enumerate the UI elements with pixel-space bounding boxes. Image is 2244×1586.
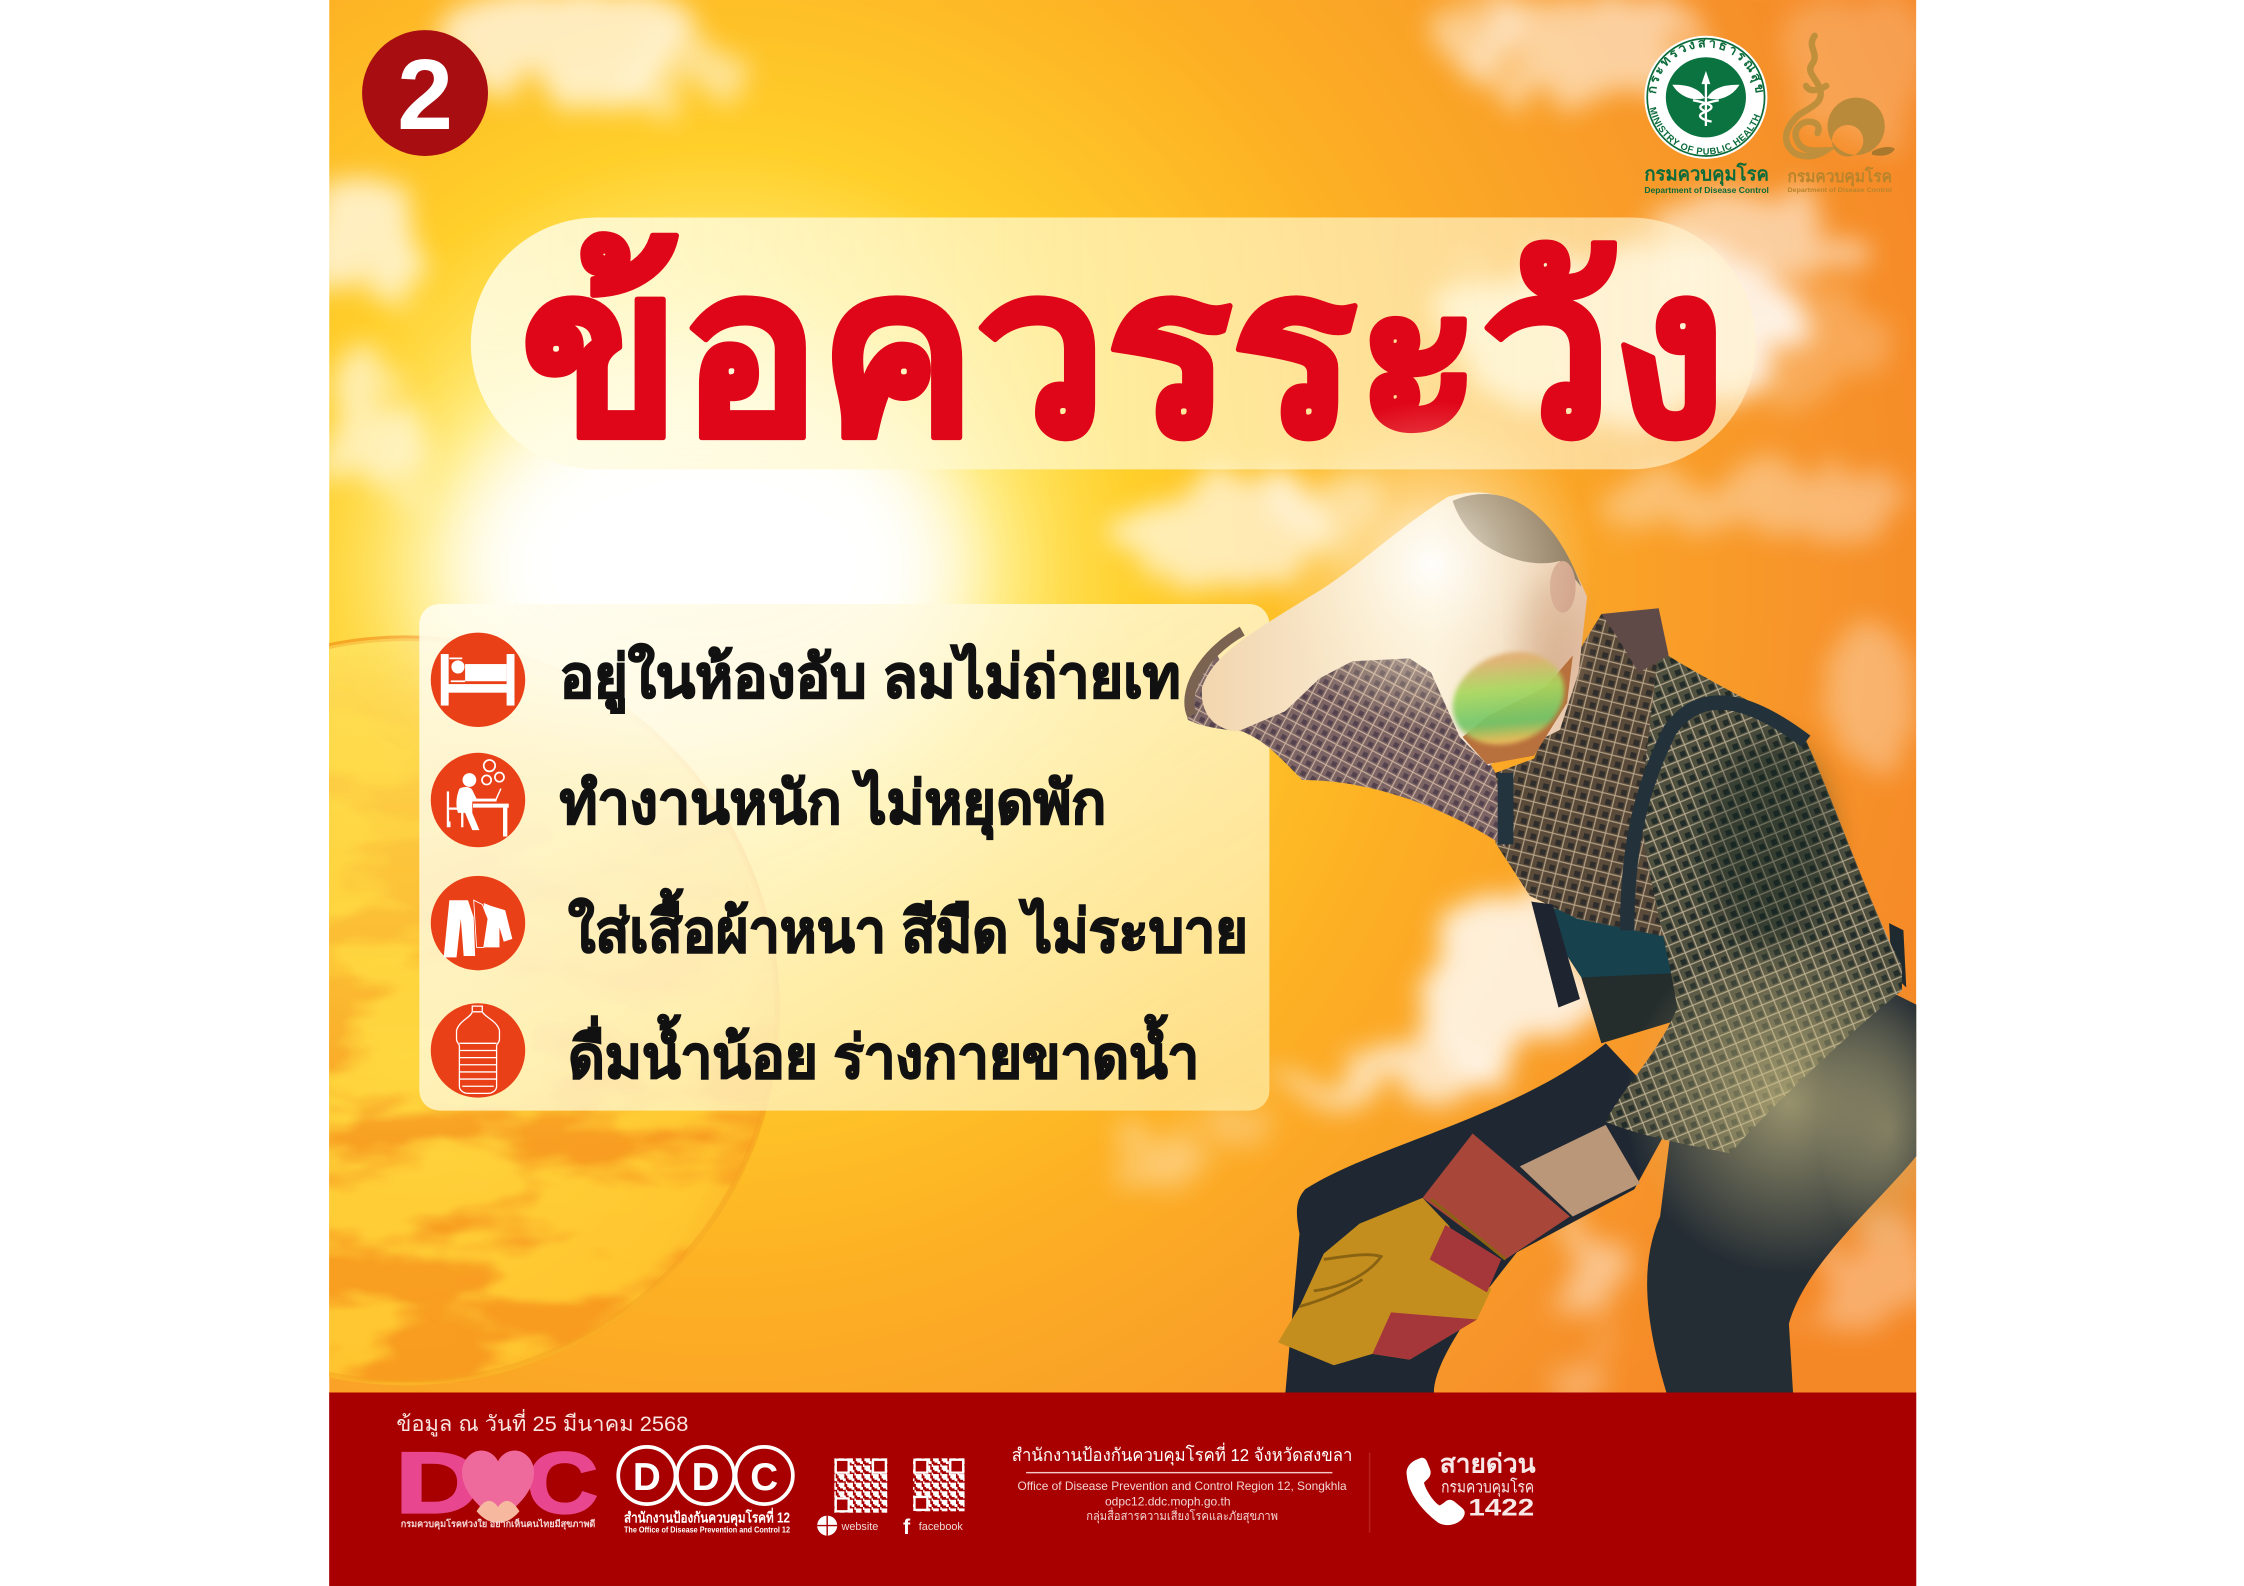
logo: ministry of public health bbox=[1644, 36, 1769, 195]
footer band bbox=[329, 1392, 1916, 1586]
logo: ministry of public health: Department of Disease Control bbox=[1644, 186, 1769, 195]
hotline: สายด่วน bbox=[1440, 1451, 1536, 1479]
logo: 60 years: Department of Disease Control bbox=[1787, 187, 1892, 194]
data date: ข้อมูล ณ วันที่ 25 มีนาคม 2568 bbox=[396, 1409, 688, 1437]
suspender straps bbox=[1627, 703, 1806, 930]
logo: white DDC: สำนักงานป้องกันควบคุมโรคที่ 12 bbox=[624, 1507, 790, 1527]
icon: worker at desk bbox=[431, 753, 525, 847]
logo: pink DDC: D bbox=[395, 1436, 481, 1532]
torso shirt bbox=[1496, 614, 1663, 936]
qr: facebook bbox=[903, 1458, 965, 1539]
left sleeve bbox=[1186, 647, 1506, 847]
logo: ministry of public health: MINISTRY OF PUBLIC HEALTH bbox=[1650, 107, 1760, 155]
illustration: worker bbox=[1186, 401, 1961, 1395]
icon: phone bbox=[1407, 1458, 1465, 1525]
risk text 2: ทำงานหนัก ไม่หยุดพัก bbox=[560, 769, 1106, 840]
title pill bbox=[471, 218, 1756, 469]
office info: odpc12.ddc.moph.go.th bbox=[1105, 1495, 1231, 1509]
panel: precautions bbox=[419, 604, 1269, 1111]
side of face shading bbox=[1520, 577, 1577, 697]
qr: facebook: f bbox=[903, 1515, 911, 1539]
glove bbox=[1278, 1133, 1570, 1365]
logo: pink DDC bbox=[395, 1436, 598, 1532]
collar bbox=[1601, 608, 1669, 673]
logo label: กรมควบคุมโรค bbox=[1787, 166, 1892, 187]
office info: Office of Disease Prevention and Control Region 12, Songkhla bbox=[1018, 1479, 1347, 1493]
logo: white DDC: C bbox=[750, 1456, 778, 1499]
icon: water bottle bbox=[431, 1003, 525, 1098]
logo: white DDC: D bbox=[692, 1456, 719, 1499]
logo: white DDC bbox=[618, 1447, 793, 1535]
office info: กลุ่มสื่อสารความเสี่ยงโรคและภัยสุขภาพ bbox=[1086, 1507, 1278, 1524]
wrist cuff bbox=[1189, 631, 1242, 716]
right sleeve bbox=[1606, 650, 1902, 1153]
logo: white DDC: The Office of Disease Prevention and Control 12 bbox=[624, 1526, 790, 1535]
logo: pink DDC: กรมควบคุมโรคห่วงใย อยากเห็นคนไทยมีสุขภาพดี bbox=[401, 1517, 595, 1530]
number badge: 2 bbox=[397, 39, 453, 151]
lens flare bbox=[1439, 636, 1578, 761]
logo: white DDC: D bbox=[633, 1456, 661, 1499]
risk text 3: ใส่เสื้อผ้าหนา สีมืด ไม่ระบาย bbox=[568, 889, 1248, 965]
office info: สำนักงานป้องกันควบคุมโรคที่ 12 จังหวัดสงขลา bbox=[1012, 1442, 1352, 1466]
hotline: 1422 bbox=[1468, 1495, 1534, 1522]
forearm right bbox=[1520, 1125, 1640, 1216]
back of overalls bbox=[1889, 923, 1906, 987]
icon: clothes bbox=[431, 876, 525, 970]
sleeve shadow bbox=[1703, 737, 1832, 952]
overalls bib bbox=[1531, 902, 1682, 1043]
qr: facebook: facebook bbox=[919, 1521, 963, 1533]
risk text 1: อยู่ในห้องอับ ลมไม่ถ่ายเท bbox=[560, 643, 1181, 713]
sun glow bbox=[429, 386, 973, 744]
logo: ministry of public health: กระทรวงสาธารณสุข bbox=[1648, 40, 1764, 94]
head and raised forearm bbox=[1202, 492, 1587, 766]
hanging strap bbox=[1531, 902, 1580, 1008]
risk text 4: ดื่มน้ำน้อย ร่างกายขาดน้ำ bbox=[568, 1015, 1199, 1091]
number badge bbox=[362, 30, 488, 156]
hotline: กรมควบคุมโรค bbox=[1441, 1478, 1534, 1498]
logo label: กรมควบคุมโรค bbox=[1644, 162, 1769, 186]
office info bbox=[1012, 1442, 1352, 1524]
beard bbox=[1463, 655, 1573, 764]
hotline bbox=[1407, 1451, 1536, 1525]
title: ข้อควรระวัง bbox=[521, 222, 1726, 484]
clouds bbox=[306, 0, 1932, 1388]
right leg bbox=[1647, 995, 1925, 1395]
qr: website bbox=[817, 1458, 887, 1536]
planet bbox=[329, 635, 779, 1386]
lens glare bbox=[1267, 401, 1596, 730]
ear bbox=[1550, 561, 1576, 613]
logo: 60 years bbox=[1786, 36, 1895, 194]
left leg bbox=[1285, 1043, 1674, 1395]
logo: pink DDC: C bbox=[527, 1436, 598, 1532]
icon: bed bbox=[431, 633, 525, 727]
poster background bbox=[329, 0, 1916, 1392]
lower haze bbox=[1624, 930, 1953, 1274]
qr: website: website bbox=[841, 1521, 878, 1533]
hair bbox=[1453, 494, 1581, 587]
